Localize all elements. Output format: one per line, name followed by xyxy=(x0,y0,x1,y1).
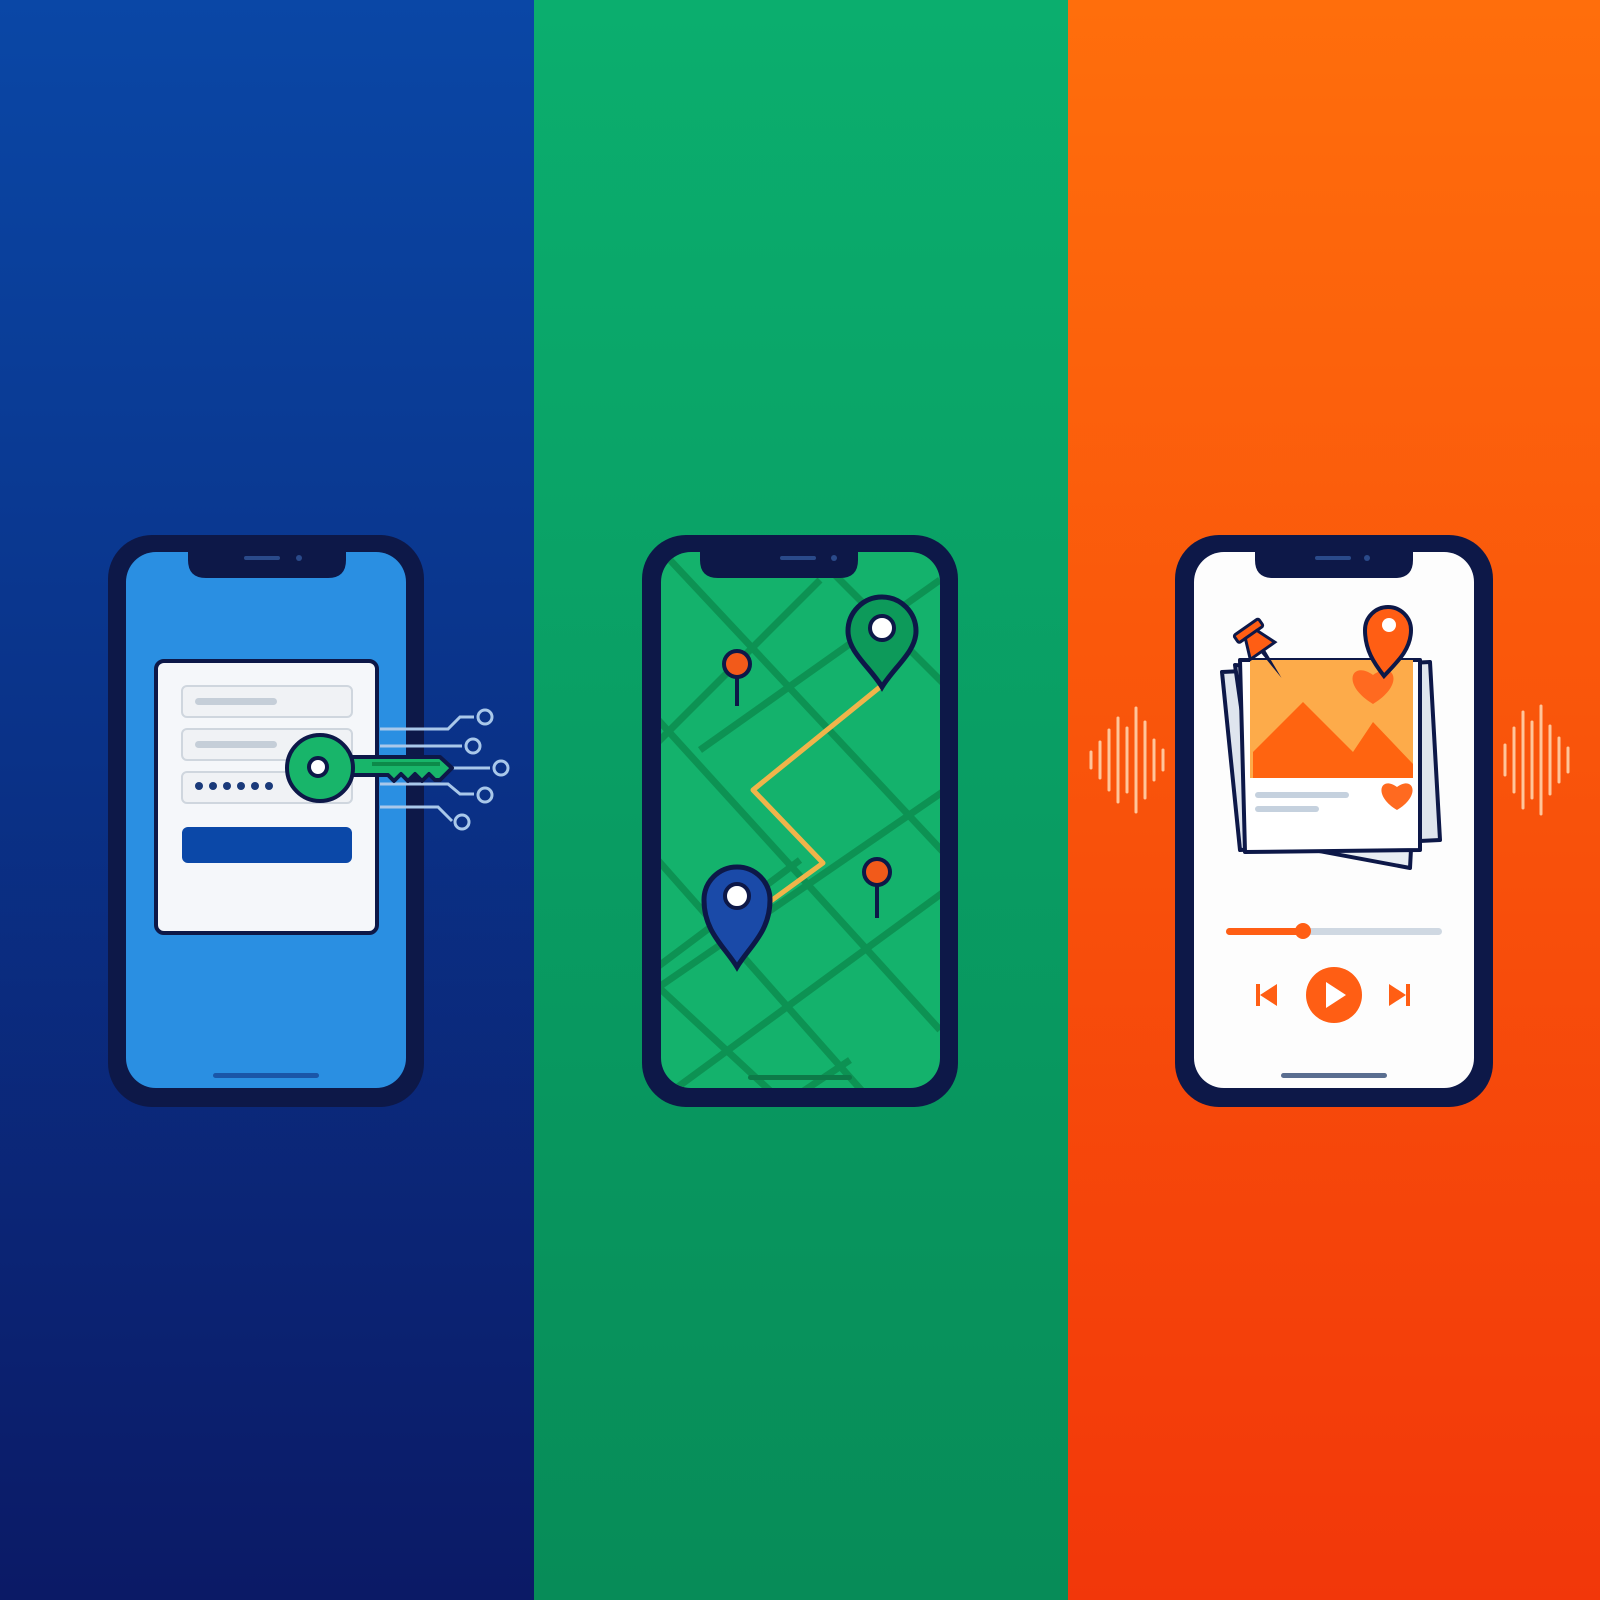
map route xyxy=(742,687,880,922)
media controls xyxy=(1256,967,1410,1023)
login form card xyxy=(156,661,377,933)
icon: blue pin xyxy=(704,867,770,967)
sound waves left xyxy=(1091,708,1163,812)
photo stack xyxy=(1222,660,1440,868)
phone: map xyxy=(640,535,960,1107)
icon: location pin xyxy=(1365,607,1411,676)
panel: orange background xyxy=(1068,0,1600,1600)
progress bar xyxy=(1226,923,1442,939)
panel: blue background xyxy=(0,0,534,1600)
circuit lines xyxy=(380,710,508,829)
icon: orange pin small left xyxy=(724,651,750,706)
photo image xyxy=(1250,660,1413,812)
icon: green pin xyxy=(848,597,916,687)
phone: login xyxy=(108,535,508,1107)
sound waves right xyxy=(1505,706,1568,814)
icon: pushpin xyxy=(1234,618,1294,686)
icon: green key xyxy=(287,735,452,801)
map roads xyxy=(661,558,940,1088)
phone: media xyxy=(1175,535,1493,1107)
panel: green background xyxy=(534,0,1068,1600)
icon: orange pin small right xyxy=(864,859,890,918)
